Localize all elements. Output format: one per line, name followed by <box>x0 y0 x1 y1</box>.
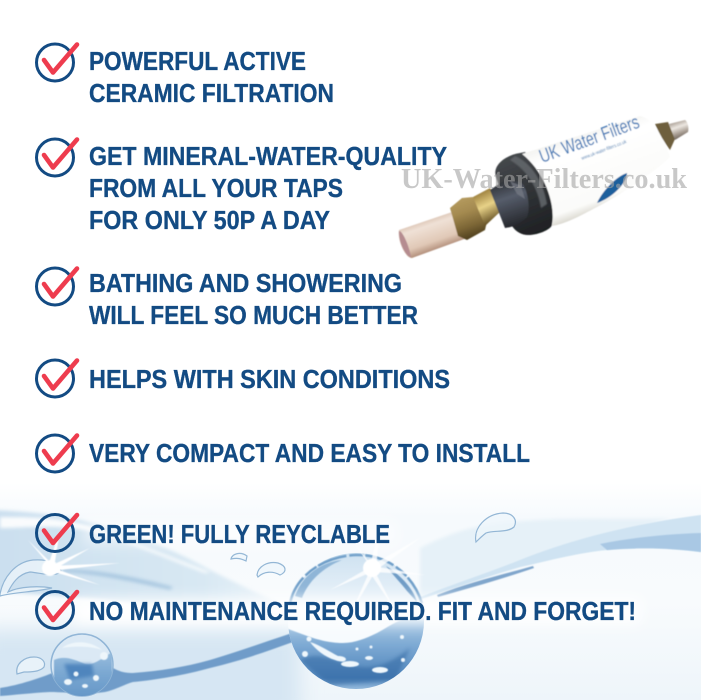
text: mineral water quality: FOR ONLY 50P A DAY <box>89 205 330 235</box>
icon: check mark <box>36 44 77 81</box>
white filter body: UK Water Filters <box>537 112 642 168</box>
icon: check mark <box>36 435 77 472</box>
water droplets <box>0 513 515 674</box>
text: compact and easy: VERY COMPACT AND EASY TO INSTALL <box>89 438 530 468</box>
icon: check mark <box>36 268 77 305</box>
light flare: left <box>28 530 120 585</box>
benefit 7 <box>36 592 636 628</box>
benefit 4 <box>36 360 450 397</box>
benefit 3 <box>36 268 418 330</box>
text: powerful ceramic filtration: POWERFUL ACTIVE <box>89 46 306 76</box>
white filter body: www.uk-water-filters.co.uk <box>581 139 628 162</box>
benefit 5 <box>36 435 530 472</box>
text: powerful ceramic filtration <box>89 46 334 108</box>
light flare: large sphere <box>330 525 425 615</box>
product photo: inline water filter <box>399 112 688 258</box>
text: bathing and showering <box>89 268 418 330</box>
text: mineral water quality: GET MINERAL-WATER-QUALITY <box>89 141 447 171</box>
icon: check mark <box>36 592 77 628</box>
brass compression fitting <box>450 188 502 240</box>
text: recyclable: GREEN! FULLY REYCLABLE <box>89 519 390 549</box>
dark flange <box>495 152 553 235</box>
benefit 1 <box>36 44 334 108</box>
icon: check mark <box>36 514 77 552</box>
outlet pipe <box>655 120 688 150</box>
white glow behind lower text <box>75 522 640 623</box>
benefit 6 <box>36 514 390 552</box>
copper inlet pipe <box>399 210 467 258</box>
text: no maintenance: NO MAINTENANCE REQUIRED. FIT AND FORGET! <box>89 596 636 626</box>
text: bathing and showering: WILL FEEL SO MUCH BETTER <box>89 300 418 330</box>
text: skin conditions: HELPS WITH SKIN CONDITIONS <box>89 364 450 394</box>
icon: check mark <box>36 360 77 397</box>
dark connector <box>490 178 529 228</box>
watermark: UK-Water-Filters.co.uk <box>401 164 687 195</box>
icon: check mark <box>36 139 77 176</box>
benefit 2 <box>36 139 447 235</box>
text: mineral water quality <box>89 141 447 235</box>
text: powerful ceramic filtration: CERAMIC FILTRATION <box>89 78 334 108</box>
text: mineral water quality: FROM ALL YOUR TAPS <box>89 173 343 203</box>
bubble: small left sphere <box>51 634 113 698</box>
text: bathing and showering: BATHING AND SHOWERING <box>89 268 402 298</box>
white filter body <box>522 112 670 226</box>
bubble: large water sphere <box>288 553 424 689</box>
